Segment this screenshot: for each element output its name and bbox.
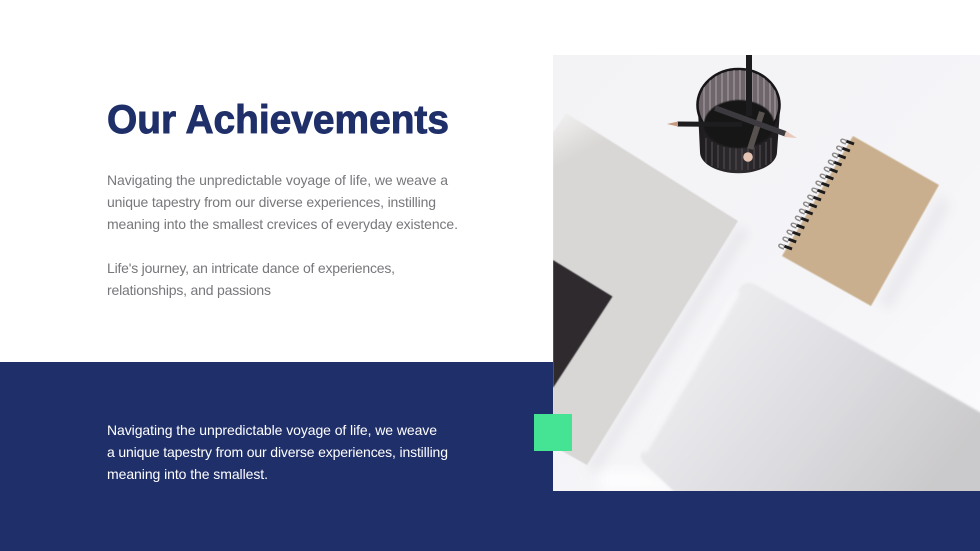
body text: second paragraph — [107, 260, 395, 298]
grey folder sheet — [553, 113, 738, 465]
title: Our Achievements — [107, 98, 449, 142]
laptop — [641, 283, 980, 500]
notebook spiral — [779, 139, 854, 249]
pen holder — [698, 69, 780, 173]
body text: first paragraph: Navigating the unpredictable voyage of life, we weave a — [107, 172, 448, 188]
navy band — [0, 362, 980, 551]
body text: first paragraph — [107, 172, 458, 232]
green accent square — [534, 414, 572, 451]
body text on navy band — [107, 422, 448, 482]
black folder — [553, 260, 612, 388]
body text on navy band: a unique tapestry from our diverse experiences, instilling — [107, 444, 448, 460]
body text: first paragraph: meaning into the smallest crevices of everyday existence. — [107, 216, 458, 232]
body text on navy band: meaning into the smallest. — [107, 466, 268, 482]
body text: second paragraph: Life's journey, an intricate dance of experiences, — [107, 260, 395, 276]
photo: desk flat lay — [553, 55, 980, 500]
body text: second paragraph: relationships, and passions — [107, 282, 271, 298]
notebook — [779, 136, 939, 306]
body text on navy band: Navigating the unpredictable voyage of life, we weave — [107, 422, 437, 438]
pencils — [667, 55, 797, 162]
body text: first paragraph: unique tapestry from our diverse experiences, instilling — [107, 194, 436, 210]
